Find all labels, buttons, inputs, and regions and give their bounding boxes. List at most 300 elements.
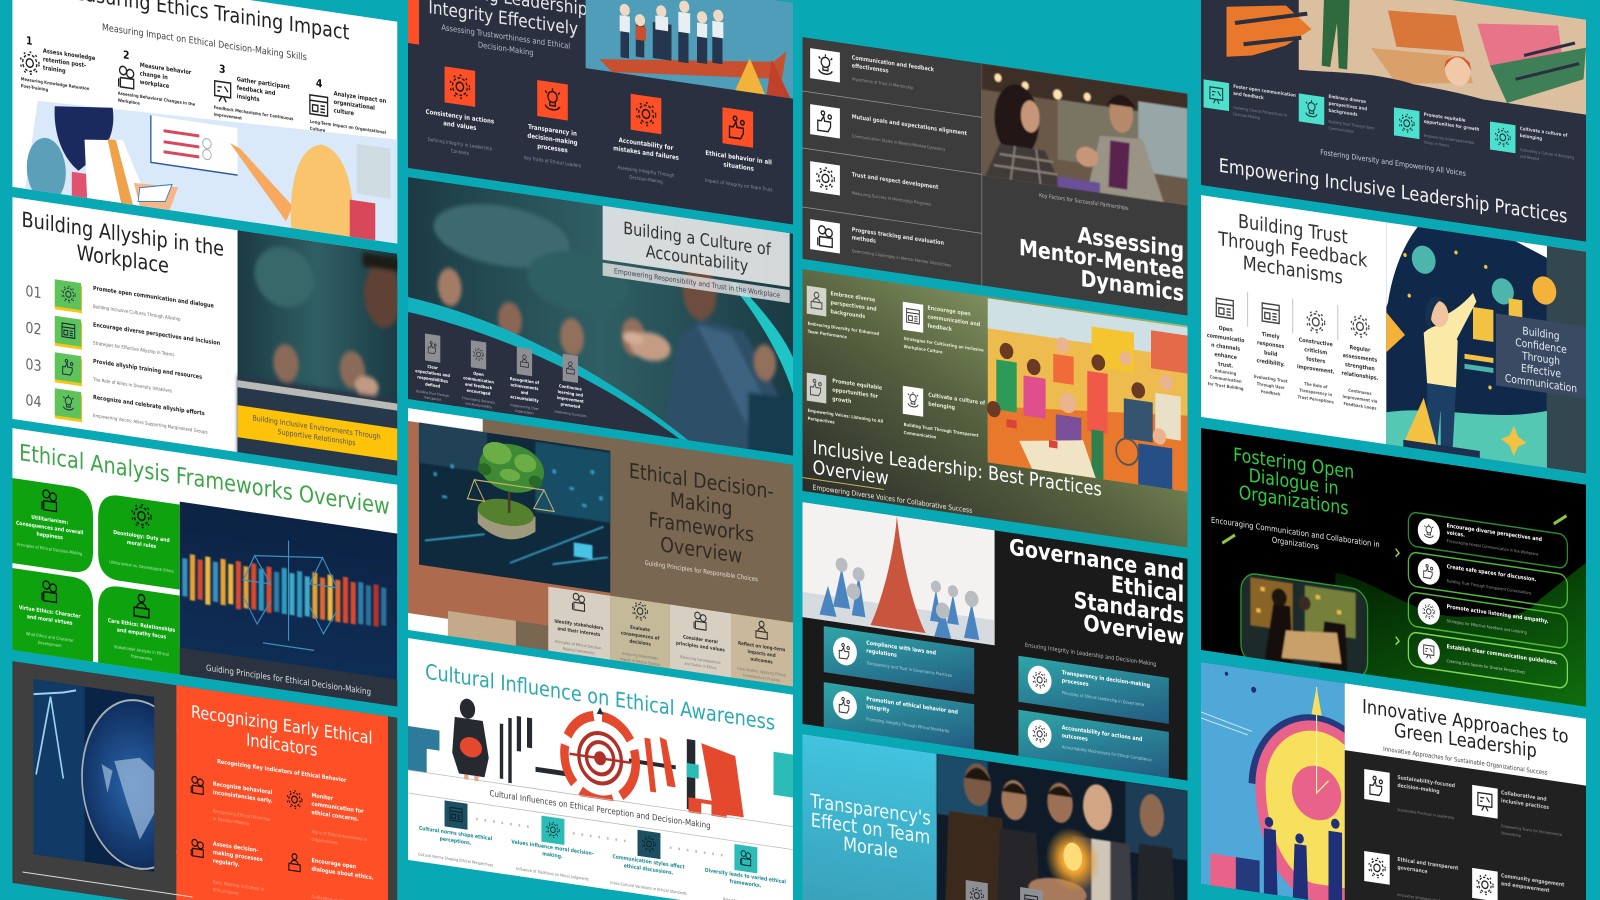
item text: transparency: Key Traits of Ethical Leaders	[524, 155, 582, 170]
item: monitor communication	[286, 790, 367, 844]
slide: Building a Culture of Accountability	[408, 177, 795, 459]
panel: orange	[176, 685, 388, 900]
column: open communication: trust.	[1218, 361, 1233, 370]
right strip	[1547, 246, 1586, 474]
card: compliance: regulations	[866, 648, 897, 659]
row: communication	[810, 48, 934, 96]
item: clear expectations: Building Trust Through	[416, 389, 449, 398]
item: assess processes	[191, 838, 265, 900]
card: stakeholders: Identify stakeholders	[554, 618, 604, 632]
title: Frameworks	[648, 507, 754, 547]
item: recognition: Recognition of	[510, 376, 539, 385]
item text: consistency	[426, 108, 494, 161]
title: Cultural Influence on Ethical Awareness	[425, 659, 775, 735]
item: diversity	[705, 840, 786, 900]
item: behavioral inconsistencies	[191, 776, 273, 830]
card: moral principles: and Duties in Ethics	[684, 661, 717, 670]
icon: middle tile	[1020, 887, 1043, 900]
panel: care ethics: and empathy focus	[117, 627, 166, 641]
item: promote equitable: opportunities for	[832, 387, 878, 400]
item: embrace diverse: backgrounds	[1329, 107, 1358, 118]
column: open communication	[1207, 297, 1245, 392]
card: moral principles: Balancing Consequences	[680, 655, 721, 665]
item: clear expectations	[415, 332, 450, 403]
item: recognition: Implementing Clear	[510, 403, 539, 411]
row 03: 03	[25, 356, 42, 376]
title: Workplace	[77, 240, 169, 278]
title: Organizations	[1239, 482, 1349, 520]
green wave	[1335, 526, 1586, 707]
card: long-term impacts: Reflect on long-term	[738, 640, 786, 654]
column: timely responses: Feedback	[1261, 389, 1281, 397]
title: Ethical Analysis Frameworks Overview	[19, 439, 390, 520]
curve: dark panel	[408, 312, 684, 443]
panel: virtue ethics: What Ethics and Character	[26, 631, 74, 643]
photo: classroom illustration	[987, 298, 1188, 492]
divider lines	[408, 770, 793, 850]
column: regular assessments: Continuous	[1348, 387, 1372, 396]
column: constructive criticism: Constructive	[1299, 337, 1333, 349]
item: behavioral inconsistencies: Recognizing Ethical Dilemmas	[213, 808, 270, 822]
card: moral principles	[670, 604, 731, 678]
item: encourage open: feedback	[927, 323, 952, 333]
panel: virtue ethics: Development	[38, 639, 62, 648]
row: progress: Overcoming Challenges in Mentor-Mentee Interactions	[852, 248, 951, 268]
step 1: Measuring Knowledge Retention	[21, 76, 89, 91]
title: Ethical	[1111, 571, 1184, 607]
slide: Ethical Analysis Frameworks Overview	[4, 427, 397, 715]
column: open communication: Open	[1219, 325, 1233, 334]
item text: transparency	[524, 123, 582, 170]
item: cultivate culture: Cultivate a culture of	[928, 392, 986, 407]
column: constructive criticism: Trust Perceptions	[1298, 394, 1334, 405]
column: timely responses: Timely	[1262, 332, 1280, 341]
caption strip: Guiding Principles for Ethical Decision-Making	[206, 663, 371, 697]
card: encourage diverse: voices.	[1447, 530, 1465, 539]
photo: tree on circuit board	[419, 423, 610, 593]
card: long-term impacts	[731, 614, 793, 687]
title: Empowering Inclusive Leadership Practices	[1219, 156, 1567, 228]
card: moral principles: Consider moral	[683, 634, 718, 646]
column: timely responses: build	[1264, 350, 1278, 358]
item: cultivate culture: Cultivating a Culture of Belonging	[1520, 148, 1574, 160]
card: safe spaces: Create safe spaces for discussion.	[1447, 564, 1536, 583]
column: timely responses: credibility.	[1256, 358, 1285, 368]
callout: yellow box	[238, 405, 397, 461]
item: promote equitable: Promote equitable	[1424, 111, 1466, 124]
photo: team around a lightbulb	[937, 754, 1188, 900]
slide: Fostering Open Dialogue in Organizations	[1201, 428, 1586, 713]
left panel	[802, 734, 937, 900]
panel: deontology: Utilitarianism vs. Deontological Ethics	[109, 560, 174, 574]
card: transparency: Transparency in decision-making	[1062, 670, 1150, 689]
item: clear expectations: defined	[425, 381, 440, 389]
item: values: making.	[542, 851, 563, 860]
card: clear guidelines: Establish clear communication guidelines.	[1447, 644, 1558, 667]
item text: transparency: Transparency in	[528, 123, 577, 138]
item: collaborative: Empowering Teams for Environmental	[1501, 824, 1562, 837]
column: constructive criticism	[1297, 309, 1335, 405]
card: compliance: Transparency and Trust in Governance Practices	[865, 660, 952, 678]
subtitle: Key Factors for Successful Partnerships	[1039, 193, 1129, 212]
subtitle: Organizations	[1272, 535, 1319, 551]
step 2: Assessing Behavioral Changes in the	[118, 90, 195, 107]
item: open communication: and feedback	[465, 381, 492, 390]
item text: ethical behavior: Ethical behavior in all	[705, 149, 772, 167]
title: Dynamics	[1081, 266, 1184, 306]
subtitle: Recognizing Key Indicators of Ethical Behavior	[217, 759, 347, 784]
illustration: target with rising arrow	[1201, 662, 1345, 900]
item: sustainability	[1364, 769, 1455, 820]
dividers	[802, 37, 982, 285]
card: consequences: decisions	[629, 638, 651, 648]
title: Assessing	[1077, 222, 1184, 263]
step 1: retention post-	[43, 57, 87, 70]
item: encourage open: communication and	[927, 314, 980, 328]
card: accountability: Accountability Mechanisms for Ethical Compliance	[1062, 744, 1152, 762]
panel: care ethics: Stakeholder Analysis in Ethical	[114, 644, 169, 657]
item: cultivate culture: Building Trust Through Transparent	[904, 422, 979, 438]
column: regular assessments	[1342, 313, 1378, 411]
subtitle: Fostering Diversity and Empowering All Voices	[1320, 148, 1466, 178]
step 4: Culture	[310, 125, 325, 133]
item: encourage open: Encourage open	[927, 305, 971, 318]
card: transparency: Principles of Ethical Leadership in Governance	[1062, 690, 1145, 707]
card: consequences: consequences of	[621, 630, 659, 642]
icon: transparency	[537, 80, 568, 120]
row 01: Promote open communication and dialogue	[93, 286, 214, 310]
item text: accountability: Decision-Making	[629, 174, 663, 186]
card: stakeholders	[548, 587, 610, 660]
item: governance: governance	[1397, 865, 1428, 876]
item: foster open: Fostering Diverse Perspectives in	[1233, 106, 1287, 118]
item: foster open: and feedback	[1233, 90, 1264, 101]
item text: consistency: Defining Integrity in Leadership	[428, 137, 492, 153]
subtitle: Measuring Impact on Ethical Decision-Making Skills	[102, 23, 307, 64]
step 2	[118, 50, 195, 106]
title block: Innovative Approaches for Sustainable Organizational Success	[1383, 746, 1548, 777]
item: monitor communication: Organizations	[311, 836, 338, 845]
title: Indicators	[246, 729, 317, 760]
item: community: and empowerment	[1501, 881, 1550, 894]
column dividers	[1248, 292, 1338, 340]
title box	[603, 206, 790, 287]
row: mutual goals: Communication Styles in Mentor-Mentee Dynamics	[852, 133, 945, 152]
card: encourage diverse: Encourage diverse perspectives and	[1447, 523, 1542, 543]
column: open communication: n channels	[1211, 342, 1240, 353]
item: values	[511, 811, 594, 882]
item: continuous learning: improvement	[557, 395, 584, 404]
item: promote equitable: Empowering Underrepresented	[1424, 134, 1474, 145]
callout: building confidence: Confidence	[1515, 337, 1567, 357]
card: encourage diverse	[1408, 512, 1567, 569]
caption strip	[180, 648, 397, 707]
item: embrace diverse: Embrace diverse	[831, 291, 876, 304]
title: Overview	[1083, 610, 1184, 650]
step 1	[20, 36, 96, 92]
illustration: inclusive workplace	[1201, 0, 1586, 242]
item: recognition: and	[521, 389, 528, 396]
item: recognition: accountability	[510, 394, 539, 403]
step 2: change in	[140, 71, 168, 82]
card: accountability: Accountability for actions and	[1062, 725, 1143, 743]
row 04	[26, 388, 208, 434]
subtitle: Cultural Influences on Ethical Perception and Decision-Making	[490, 788, 711, 831]
column: regular assessments: Feedback Loops	[1343, 401, 1377, 411]
column: constructive criticism: criticism	[1304, 347, 1328, 357]
item: cultivate culture: and Respect	[1520, 154, 1540, 161]
item: collaborative: inclusive practices	[1501, 798, 1549, 811]
item: governance: Ethical and transparent	[1397, 857, 1459, 872]
curve: right teal band	[729, 282, 793, 394]
card: safe spaces	[1408, 552, 1567, 609]
connector dots	[476, 819, 724, 856]
subtitle: Encouraging Communication and Collaboration in	[1211, 515, 1380, 549]
illustration: target and stripes	[408, 679, 793, 837]
photo: mentor and mentee	[982, 63, 1188, 206]
step 4	[309, 79, 386, 134]
step 3: Improvement	[214, 111, 242, 121]
card: promotion	[824, 682, 974, 750]
item: promote equitable: growth	[832, 396, 852, 405]
subtitle: Ensuring Integrity in Leadership and Decision-Making	[1025, 642, 1156, 668]
photo: night city meeting	[1241, 572, 1368, 680]
item: open dialogue: Encourage open	[311, 858, 356, 871]
illustration: assessment scene	[25, 100, 398, 244]
item: sustainability: Sustainability-focused	[1397, 775, 1455, 790]
item: recognition: Expectations	[515, 409, 534, 416]
card: safe spaces: Building Trust Through Transparent Conversations	[1447, 579, 1531, 596]
item: open communication	[462, 339, 495, 410]
column: timely responses: responses	[1257, 340, 1284, 350]
callout: building confidence: Communication	[1505, 373, 1577, 396]
item: clear expectations: Clear	[427, 364, 438, 370]
column: timely responses	[1254, 302, 1288, 398]
item: cultural norms: perceptions.	[440, 836, 472, 847]
slide: Governance and Ethical Standards Overview	[802, 502, 1188, 782]
item: continuous learning: promoted	[561, 401, 580, 409]
item: values: Values influence moral decision-	[511, 839, 594, 857]
column: regular assessments: assessments	[1343, 353, 1377, 364]
slide: Cultural Influence on Ethical Awareness	[408, 638, 793, 900]
item text: ethical behavior	[705, 149, 773, 194]
item: monitor communication: communication for	[311, 801, 364, 815]
step 3: Feedback Mechanisms for Continuous	[214, 104, 294, 121]
column: constructive criticism: The Role of	[1304, 381, 1328, 390]
item: continuous learning: Continuous	[559, 383, 582, 392]
panel: deontology: moral rules	[127, 540, 156, 550]
column: constructive criticism: fosters	[1306, 356, 1325, 365]
row: mutual goals	[810, 104, 967, 157]
item: diversity: frameworks.	[730, 878, 761, 890]
item: clear expectations: Transparent	[423, 395, 442, 402]
item: clear expectations: responsibilities	[417, 374, 449, 384]
title: Overview	[813, 457, 889, 490]
card: active listening: Strategies for Effective Feedback and Listening	[1447, 619, 1527, 635]
item text: consistency: Consistency in actions	[426, 108, 494, 126]
column: open communication: communicatio	[1207, 333, 1245, 345]
column: regular assessments: strengthen	[1345, 362, 1375, 373]
title: Mechanisms	[1243, 253, 1343, 289]
row: progress: methods	[852, 235, 876, 245]
item: encourage open: Strategies for Cultivating an Inclusive	[904, 336, 984, 353]
step 1: Post-Training	[21, 83, 48, 92]
slide: Assessing Mentor-Mentee Dynamics	[802, 37, 1188, 316]
subtitle: Guiding Principles for Responsible Choices	[645, 561, 758, 584]
item: diversity: Diversity leads to varied ethical	[705, 867, 786, 886]
callout: building confidence: Building	[1522, 326, 1560, 343]
item: open dialogue: dialogue about ethics.	[311, 866, 374, 882]
callout: building confidence: Through	[1521, 350, 1560, 368]
photo: red cone and pawns	[802, 502, 995, 645]
card: long-term impacts: Case Studies: Applying Ethical	[737, 666, 786, 678]
panel: deontology	[98, 493, 180, 590]
card: compliance: Compliance with laws and	[866, 640, 936, 657]
panel: care ethics	[98, 584, 180, 683]
card: compliance	[824, 626, 974, 694]
item: assess processes: Assess decision-	[213, 841, 258, 854]
card: transparency: processes	[1062, 678, 1089, 688]
item: values: Influence of Traditions on Moral Judgments	[516, 867, 589, 882]
card: moral principles: principles and values	[676, 640, 725, 654]
card: accountability: outcomes	[1062, 733, 1088, 743]
icon: consistency	[445, 66, 475, 107]
item: cultivate culture	[1490, 121, 1574, 166]
item: communication styles: Cross-Cultural Variations in Ethical Standards	[610, 881, 687, 896]
top strip	[408, 408, 483, 432]
card: active listening	[1408, 592, 1567, 649]
item: recognition: achievements	[510, 382, 539, 391]
item: embrace diverse	[1299, 89, 1374, 137]
row 03	[26, 352, 202, 392]
item: foster open: Decision-Making	[1233, 112, 1260, 120]
step 3: 3	[219, 63, 226, 77]
item: communication styles: ethical discussions.	[624, 863, 673, 877]
item text: accountability	[613, 136, 679, 188]
title: Through Feedback	[1217, 229, 1368, 272]
column: timely responses: Evaluating Trust	[1254, 373, 1288, 384]
item: continuous learning: learning and	[558, 389, 583, 398]
column: regular assessments: Regular	[1350, 345, 1371, 354]
item: collaborative: Collaborative and	[1501, 790, 1547, 803]
item: encourage open: Workplace Culture	[904, 344, 943, 355]
item: communication styles	[610, 826, 687, 896]
slide: Building Allyship in the Workplace	[12, 197, 402, 479]
item: open communication: Encouraging Openness	[462, 396, 495, 405]
row 01: Building Inclusive Cultures Through Allyship	[93, 304, 181, 323]
row: progress: Progress tracking and evaluation	[852, 227, 944, 247]
title: Inclusive Leadership: Best Practices	[813, 437, 1102, 501]
rule	[22, 872, 192, 898]
card: stakeholders: and their interests	[557, 626, 601, 638]
card: consequences: Impact in Ethical Choices	[620, 657, 660, 667]
slide: Innovative Approaches to Green Leadership	[1201, 662, 1586, 900]
title box: Building a Culture of	[623, 218, 771, 260]
step 2: 2	[123, 49, 129, 62]
item: promote equitable: opportunities for growth	[1424, 118, 1479, 133]
item: embrace diverse: backgrounds	[831, 309, 865, 320]
item: open communication: and Accountability	[465, 401, 492, 409]
item: open communication: communication	[463, 375, 494, 385]
item: foster open	[1204, 79, 1296, 126]
item: cultural norms: Cultural norms shape ethical	[419, 825, 492, 843]
column: open communication: Communication	[1210, 374, 1242, 384]
item: behavioral inconsistencies: Recognize behavioral	[213, 781, 272, 796]
item text: accountability: mistakes and failures	[613, 145, 679, 162]
item: promote equitable: Promote equitable	[832, 378, 883, 392]
item: embrace diverse: Embracing Diversity for Enhanced	[808, 320, 879, 336]
panel: utilitarianism: Utilitarianism:	[31, 514, 68, 526]
column: regular assessments: relationships.	[1342, 370, 1378, 382]
title: Governance and	[1009, 534, 1184, 585]
title block: Innovative Approaches to	[1362, 697, 1569, 748]
title: Overview	[660, 532, 742, 569]
column: constructive criticism: Transparency in	[1299, 387, 1332, 397]
step 2: Measure behavior	[140, 62, 192, 77]
row: communication: Communication and feedback	[852, 55, 934, 74]
item: sustainability: decision-making	[1397, 783, 1440, 795]
subtitle: Assessing Trustworthiness and Ethical	[441, 22, 570, 51]
row 02: Encourage diverse perspectives and inclusion	[93, 322, 220, 347]
row 02: Strategies for Effective Allyship in Teams	[93, 340, 175, 359]
slide: Building Trust Through Feedback Mechanisms	[1201, 195, 1586, 474]
callout: building confidence	[1496, 313, 1586, 399]
card: clear guidelines	[1408, 632, 1567, 689]
column: regular assessments: Improvement via	[1342, 394, 1378, 404]
title: Morale	[843, 834, 898, 863]
item: continuous learning	[554, 352, 587, 418]
row: communication: Importance of Trust in Mentorship	[852, 76, 914, 90]
callout: building confidence: Effective	[1521, 363, 1561, 381]
illustration: team on an arrow	[586, 0, 793, 99]
item: assess processes: Ethical Issues	[213, 887, 239, 896]
item: open dialogue	[289, 853, 374, 900]
card: consequences	[610, 596, 670, 669]
item: promote equitable	[807, 373, 884, 432]
panel: care ethics: Care Ethics: Relationships	[108, 618, 175, 634]
panel: utilitarianism: Consequences and overall	[16, 520, 84, 537]
title: Making	[670, 487, 733, 521]
callout: yellow box: Supportive Relationships	[278, 428, 356, 448]
title: Dialogue in	[1249, 465, 1339, 500]
item text: consistency: Contexts	[451, 148, 470, 157]
row 03: Provide allyship training and resources	[93, 359, 202, 381]
step 2: workplace	[140, 79, 169, 90]
item: foster open: Foster open communication	[1233, 83, 1296, 99]
column: constructive criticism: improvement.	[1297, 364, 1335, 376]
slide: Empowering Inclusive Leadership Practices	[1201, 0, 1586, 242]
card: consequences: Analyzing Stakeholder	[622, 651, 659, 661]
card: active listening: Promote active listening and empathy.	[1447, 604, 1549, 625]
step 1: Assess knowledge	[43, 48, 95, 62]
step 1: 1	[26, 34, 33, 48]
slide: Recognizing Early Ethical Indicators	[12, 661, 397, 900]
item: embrace diverse: Communication	[1329, 126, 1354, 134]
title: Building Trust	[1238, 211, 1348, 249]
card: long-term impacts: impacts and	[748, 649, 776, 659]
slide: Measuring Ethics Training Impact	[12, 0, 397, 254]
photo: pointing leader and team	[408, 177, 795, 459]
title box: Accountability	[646, 241, 748, 276]
step 3: Gather participant	[237, 77, 290, 91]
title: Effect on Team	[811, 810, 930, 849]
card: consequences: Evaluate	[630, 624, 650, 634]
item: embrace diverse: Team Performance	[808, 328, 847, 340]
row: communication: effectiveness	[852, 63, 889, 75]
item: cultivate culture: belonging	[1520, 133, 1542, 142]
title: Transparency's	[809, 791, 931, 830]
column: open communication: for Trust Building	[1208, 381, 1244, 391]
